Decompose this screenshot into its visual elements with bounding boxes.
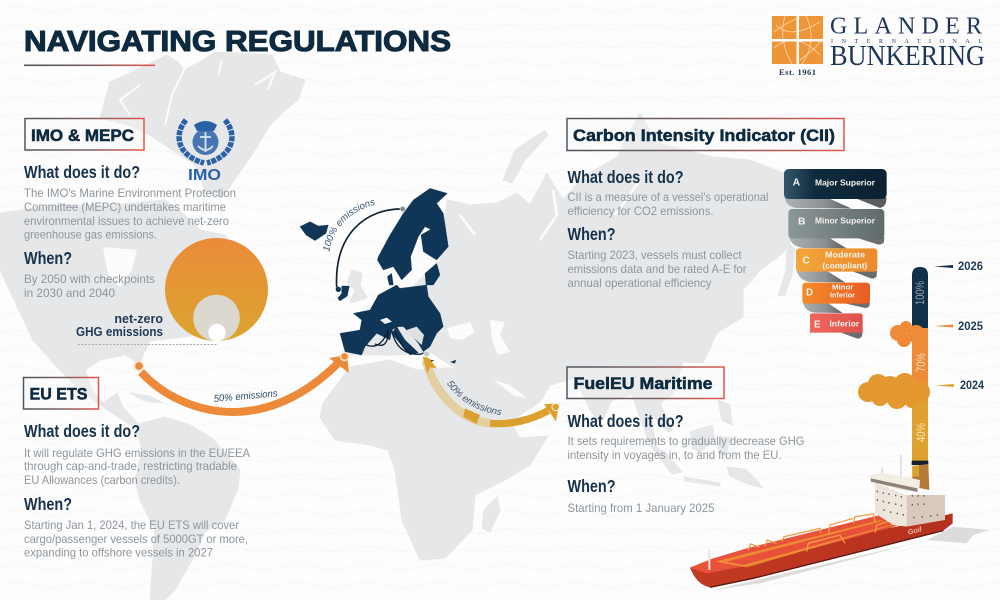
ribbon: D Minor Inferior [802, 282, 870, 304]
stack percentage labels: 40% [916, 423, 928, 442]
timeline marker 2024 [935, 378, 984, 392]
timeline marker 2026 [934, 259, 983, 273]
icon: IMO emblem: IMO [188, 167, 221, 184]
cloud 2025 [890, 321, 925, 347]
map: Great Britain [347, 270, 367, 303]
timeline marker 2025: 2025 [958, 319, 983, 333]
logo mark [772, 16, 823, 64]
ribbon: C Moderate (compliant): Moderate [825, 250, 865, 260]
text: when [24, 248, 155, 300]
text: what does it do: intensity in voyages in, to and from the EU. [568, 448, 782, 462]
text: when: When? [568, 224, 616, 244]
panel: EU ETS [24, 378, 250, 560]
logo wordmark: INTERNATIONAL [831, 39, 982, 45]
map: Africa [320, 360, 548, 560]
arrow: 50% emissions to Europe [134, 352, 349, 412]
text: when [568, 224, 746, 290]
text: what does it do [568, 411, 804, 462]
heading box: FuelEU Maritime: FuelEU Maritime [574, 374, 712, 393]
text: what does it do: What does it do? [24, 421, 140, 441]
map: Iceland [300, 222, 328, 241]
text: what does it do: greenhouse gas emissions. [24, 228, 157, 242]
text: when: expanding to offshore vessels in 2027 [24, 546, 213, 560]
chart: net-zero nested circles [165, 238, 268, 341]
text: what does it do: What does it do? [24, 162, 140, 182]
panel: FuelEU Maritime [567, 367, 804, 515]
text: when: When? [24, 494, 72, 514]
arc: 100% emissions: 100% emissions [323, 200, 375, 252]
heading box: FuelEU Maritime [567, 367, 724, 398]
text: when: emissions data and be rated A-E for [568, 262, 746, 276]
text: what does it do: What does it do? [568, 167, 684, 187]
text: when: By 2050 with checkpoints [24, 272, 155, 286]
map: North America [0, 200, 240, 425]
ship shadow [713, 527, 990, 590]
hull [690, 513, 953, 587]
ribbon: A Major Superior [784, 169, 887, 199]
ribbon connectors [784, 197, 887, 339]
map: Japan [778, 240, 795, 296]
text: what does it do: CII is a measure of a vessel's operational [568, 190, 768, 204]
logo wordmark: BUNKERING [830, 41, 985, 72]
text: what does it do: through cap-and-trade, restricting tradable [24, 459, 237, 473]
ribbon: C Moderate (compliant): C [802, 256, 810, 267]
arrow: 50% emissions to Europe: 50% emissions [213, 388, 278, 405]
ribbon: B Minor Superior [788, 209, 884, 238]
map: Arctic channels [120, 60, 275, 125]
deck [690, 515, 900, 573]
panel: IMO & MEPC [24, 118, 268, 344]
stack percentage labels: 100% [915, 281, 927, 305]
map: Cyprus and Crete [427, 359, 456, 363]
text: what does it do: The IMO's Marine Environment Protection [24, 186, 236, 200]
superstructure [875, 483, 907, 527]
text: when: Starting 2023, vessels must collect [568, 248, 742, 262]
text: when [568, 476, 715, 515]
text: what does it do: It sets requirements to gradually decrease GHG [568, 434, 804, 448]
ribbon: C Moderate (compliant) [796, 248, 877, 272]
illustration: tanker ship [690, 455, 990, 590]
bridge roof [870, 473, 920, 492]
text: what does it do: What does it do? [568, 411, 684, 431]
heading box: IMO & MEPC [25, 118, 144, 150]
heading box: IMO & MEPC: IMO & MEPC [31, 126, 134, 145]
map: Baltic states [425, 263, 440, 285]
ribbon: E Inferior: E [814, 319, 821, 330]
logo wordmark: Est. 1961 [779, 67, 816, 77]
map: Madagascar [482, 497, 500, 532]
map: Java [684, 477, 720, 486]
text: what does it do: efficiency for CO2 emissions. [568, 204, 714, 218]
map: Ireland [338, 286, 349, 301]
ribbon: D Minor Inferior: Minor [832, 282, 853, 291]
text: what does it do: Committee (MEPC) undertakes maritime [24, 200, 226, 214]
map: Balkan non-EU states [407, 327, 424, 345]
map: Novaya Zemlya [503, 130, 548, 183]
stack percentage labels: 70% [916, 353, 928, 372]
heading box: EU ETS [24, 378, 98, 409]
map: Scandinavia [377, 188, 448, 280]
timeline marker 2024: 2024 [960, 378, 984, 392]
map: Borneo [690, 425, 715, 452]
label: net-zero GHG emissions: GHG emissions [76, 325, 163, 339]
chart: CII rating ribbons [784, 169, 887, 339]
cloud 2024 [858, 373, 930, 409]
text: what does it do: EU Allowances (carbon credits). [24, 473, 180, 487]
map: Hudson Bay [103, 247, 137, 287]
map: Sulawesi [718, 437, 732, 455]
map: Black Sea [447, 322, 475, 340]
text: when: annual operational efficiency [568, 276, 712, 290]
stack segment 2026 [912, 267, 928, 330]
ribbon: C Moderate (compliant): (compliant) [822, 261, 868, 271]
funnel base [912, 461, 928, 465]
stack percentage labels [915, 281, 928, 442]
logo wordmark: GLANDER [830, 14, 982, 40]
text: what does it do [24, 162, 236, 242]
stack segment 2025 [912, 328, 928, 388]
map: Caspian Sea [490, 320, 510, 355]
map: Caribbean [130, 393, 163, 403]
map: Papua [727, 467, 763, 488]
logo wordmark [779, 14, 985, 77]
heading box: CII [567, 118, 844, 150]
title underline [24, 64, 155, 66]
arrow: 50% emissions to Arabian Sea [422, 351, 560, 428]
title: NAVIGATING REGULATIONS [24, 26, 451, 58]
logo: Glander International Bunkering [772, 14, 985, 77]
text: when [24, 494, 248, 560]
text: when: cargo/passenger vessels of 5000GT or more, [24, 532, 248, 546]
map: Greenland and Arctic Canada [100, 52, 305, 198]
ribbon: A Major Superior: A [793, 177, 801, 188]
map: South America [135, 417, 240, 600]
hull waterline [710, 531, 943, 587]
ribbon: E Inferior [810, 313, 863, 335]
cargo tanks [727, 520, 893, 565]
label: net-zero GHG emissions: net-zero [114, 312, 163, 326]
superstructure windows [877, 491, 938, 518]
ribbon: B Minor Superior: Minor Superior [815, 216, 876, 226]
text: when: Starting from 1 January 2025 [568, 501, 715, 515]
text: what does it do: It will regulate GHG emissions in the EU/EEA [24, 446, 250, 460]
ribbon: D Minor Inferior: D [806, 288, 813, 299]
deck railings [748, 514, 893, 552]
stack segment 2024 [912, 386, 928, 462]
map: Switzerland [380, 318, 392, 324]
hull name: Goil [907, 524, 924, 537]
text: when: Starting Jan 1, 2024, the EU ETS will cover [24, 518, 239, 532]
panel: Carbon Intensity Indicator [567, 118, 844, 290]
text: what does it do [24, 421, 250, 487]
arrow: 50% emissions to Arabian Sea: 50% emissions [447, 380, 502, 415]
world map background [0, 52, 830, 600]
text: when: When? [24, 248, 72, 268]
arc: maritime routes within EU [365, 330, 425, 354]
timeline marker 2026: 2026 [958, 259, 983, 273]
text: when: in 2030 and 2040 [24, 286, 115, 300]
ribbon: D Minor Inferior: Inferior [830, 291, 855, 300]
text: what does it do: environmental issues to achieve net-zero [24, 214, 229, 228]
map: Persian Gulf [493, 380, 527, 398]
heading box: CII: Carbon Intensity Indicator (CII) [573, 126, 835, 145]
map: Gulf of Ob and Arctic inlets [460, 180, 640, 240]
icon: IMO emblem [179, 120, 232, 184]
masts [709, 455, 901, 570]
timeline marker 2025 [934, 319, 983, 333]
map: EU member states and emission arcs [300, 188, 560, 428]
map: Eurasia [345, 113, 830, 450]
arc: 100% emissions [323, 200, 406, 292]
label: net-zero GHG emissions [76, 312, 217, 344]
chart: emissions smokestack timeline [858, 259, 984, 462]
map: continental Europe [340, 285, 443, 355]
ribbon: A Major Superior: Major Superior [815, 178, 876, 188]
map: Philippines [718, 400, 732, 425]
text: when: When? [568, 476, 616, 496]
map: Sumatra [650, 445, 682, 474]
map: Denmark [387, 273, 393, 285]
deck walkway [715, 520, 897, 567]
heading box: EU ETS: EU ETS [30, 384, 88, 404]
text: what does it do [568, 167, 768, 218]
ribbon: B Minor Superior: B [798, 217, 805, 228]
map: Italy [392, 327, 418, 355]
ribbon: E Inferior: Inferior [829, 318, 860, 328]
